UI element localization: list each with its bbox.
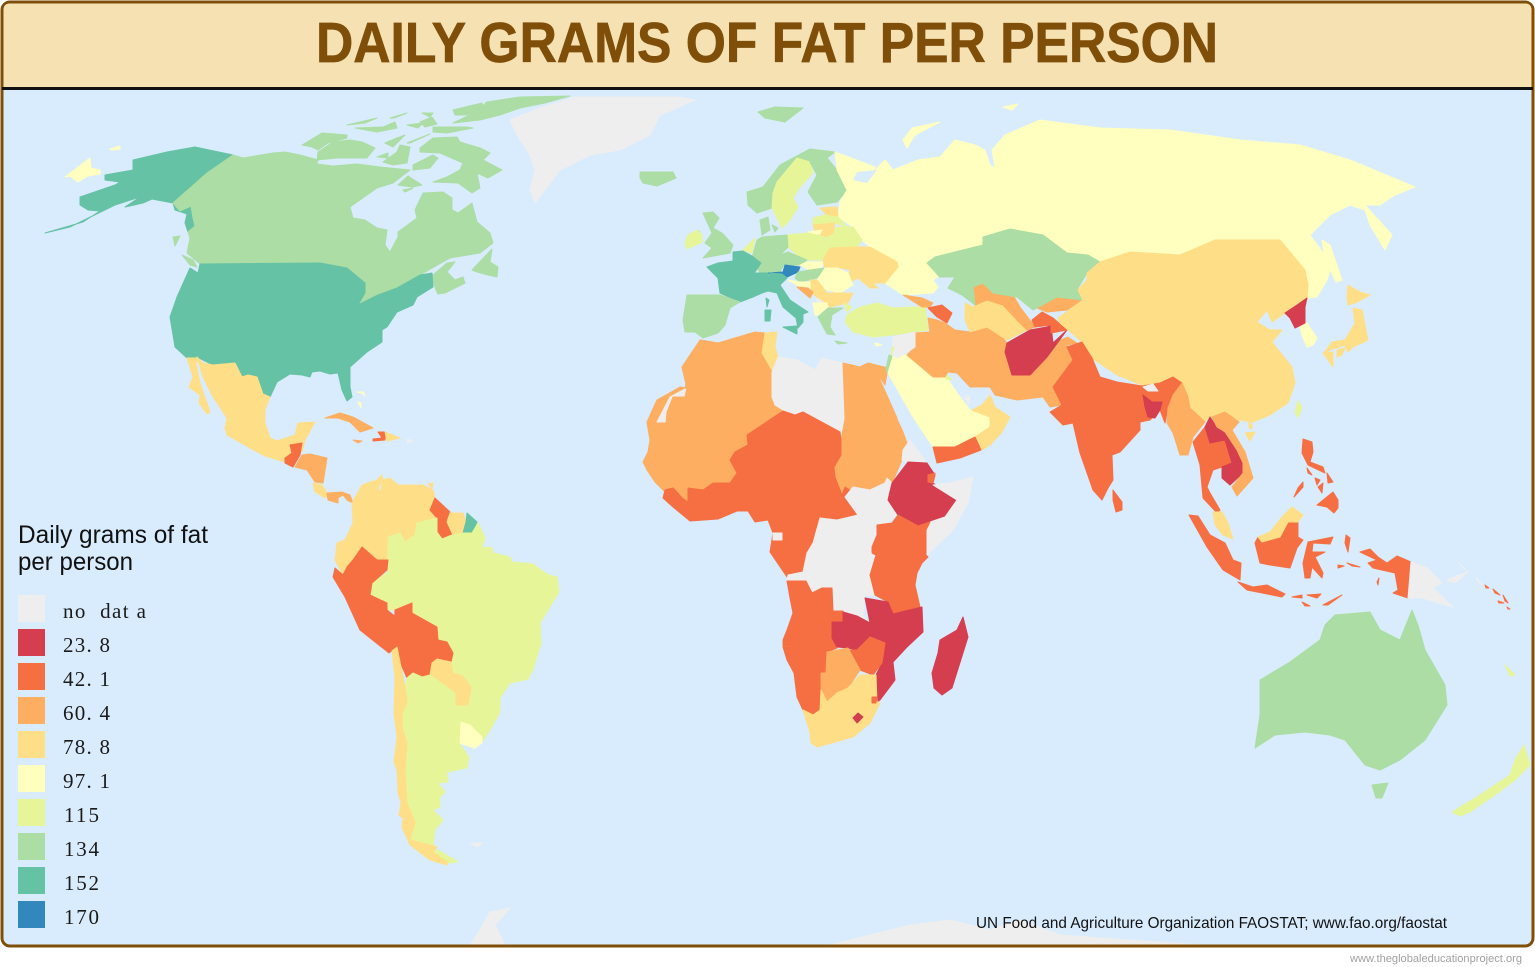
legend: 97. 1 (63, 769, 110, 793)
icon: Greenland no data (510, 97, 695, 203)
map: South America (333, 475, 559, 865)
map: North America (45, 96, 695, 503)
legend: 42. 1 (63, 667, 110, 691)
legend: 170 (64, 905, 99, 929)
title: DAILY GRAMS OF FAT PER PERSON (316, 11, 1218, 75)
icon: Afghanistan lowest value (1005, 325, 1067, 375)
legend: 134 (64, 837, 100, 861)
legend title: Daily grams of fat (18, 521, 208, 549)
map: Middle East and Asia (844, 229, 1510, 609)
legend: 23. 8 (63, 633, 110, 657)
legend: 115 (64, 803, 99, 827)
credit: www.theglobaleducationproject.org (1349, 953, 1522, 965)
legend: 152 (64, 871, 99, 895)
map: Oceania (1255, 610, 1530, 816)
source note: UN Food and Agriculture Organization FAOSTAT; www.fao.org/faostat (976, 915, 1448, 932)
legend: no dat a (63, 599, 147, 623)
legend title: per person (18, 548, 133, 576)
panel: title banner (2, 4, 1533, 90)
map: Europe (640, 104, 1415, 344)
map: Antarctica (470, 908, 1200, 945)
legend: 60. 4 (63, 701, 110, 725)
legend (18, 521, 208, 929)
icon: North Korea (1285, 298, 1307, 328)
legend: 78. 8 (63, 735, 110, 759)
icon: Austria highest value (768, 265, 800, 277)
map: Africa (643, 332, 973, 747)
